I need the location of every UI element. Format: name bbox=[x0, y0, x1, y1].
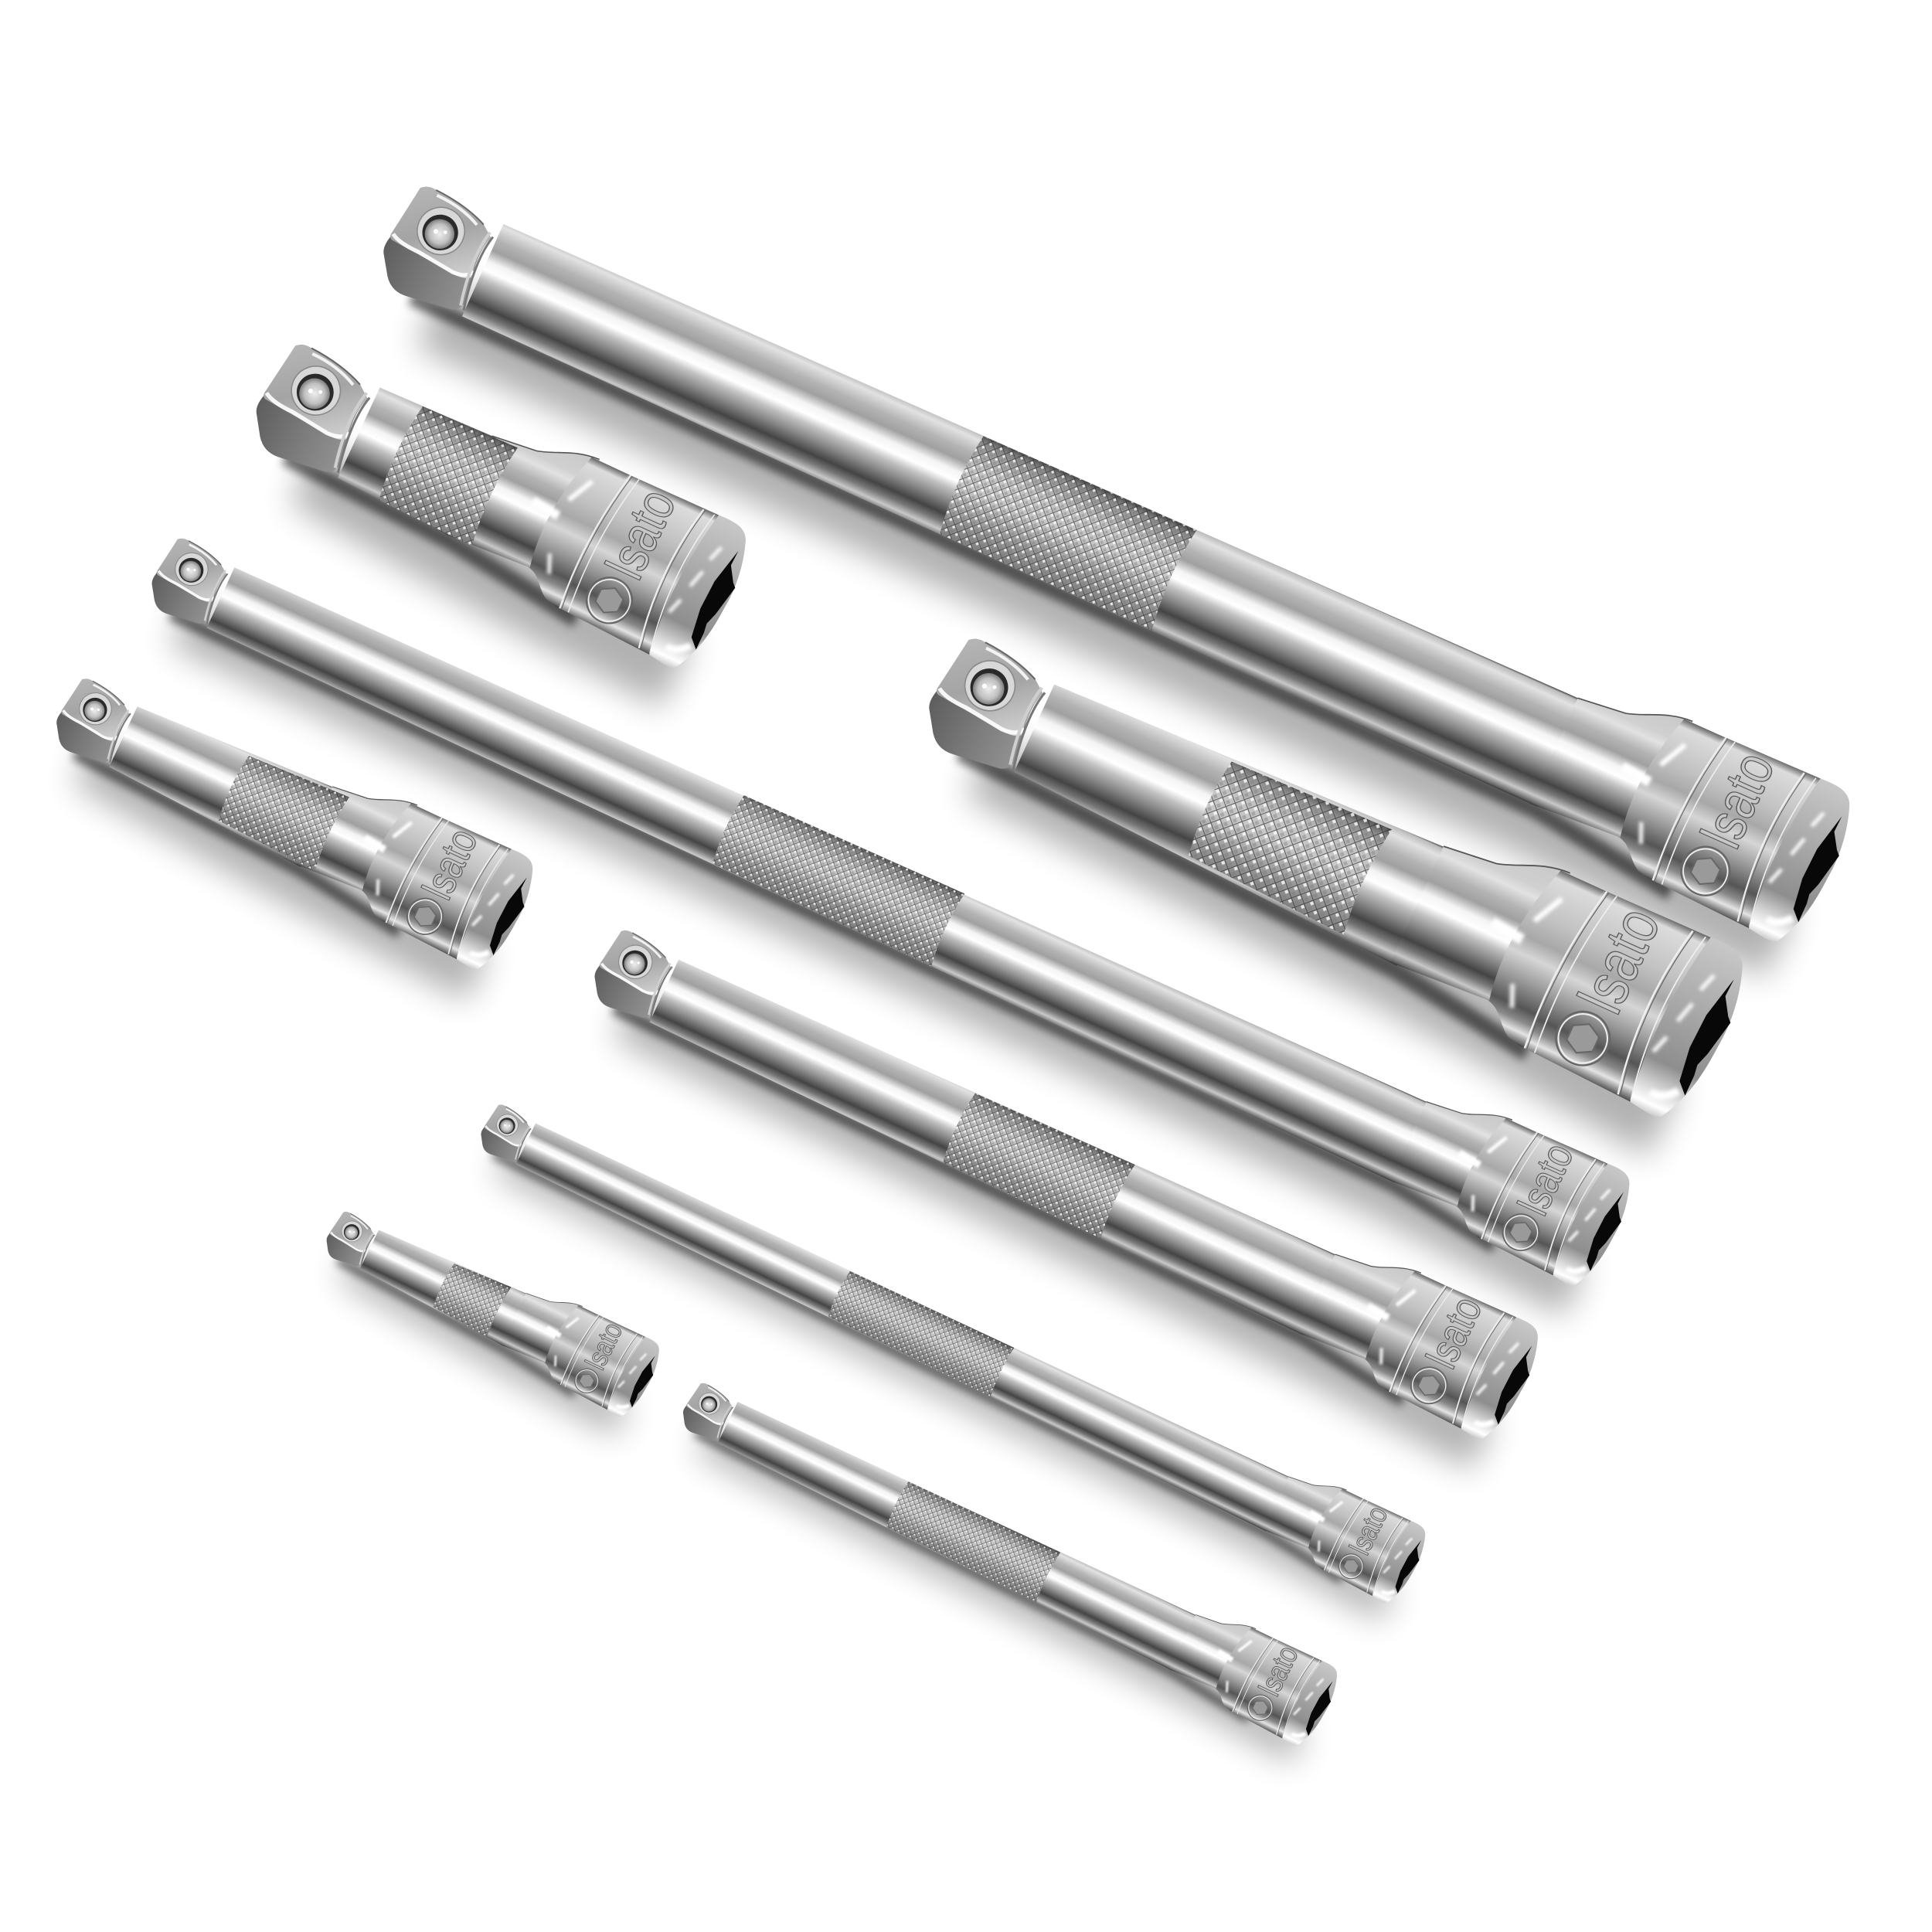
brand mark: lsato bbox=[1565, 896, 1674, 1023]
knurled grip bbox=[430, 1260, 511, 1337]
brand mark: lsato bbox=[413, 821, 487, 906]
extension bar D: long, middle bbox=[131, 512, 1641, 1294]
extension bar F: medium, centre bbox=[573, 904, 1549, 1447]
extension bar E: short, far left bbox=[36, 651, 544, 978]
extension bar I: slim, bottom bbox=[668, 1363, 1345, 1752]
brand mark: lsato bbox=[1253, 1641, 1305, 1701]
brand mark: lsato bbox=[595, 480, 688, 588]
extension bar C: short thick, upper left bbox=[231, 318, 760, 678]
knurled grip bbox=[1182, 755, 1392, 935]
extension bar B: thick, right bbox=[899, 600, 1760, 1129]
knurled grip bbox=[935, 434, 1196, 631]
knurled grip bbox=[884, 1478, 1060, 1602]
brand mark: lsato bbox=[1417, 1289, 1492, 1376]
soft shadows under the bars bbox=[61, 280, 1806, 1763]
extension bar H: smallest bbox=[312, 1193, 667, 1422]
brand mark: lsato bbox=[1689, 743, 1787, 857]
knurled grip bbox=[374, 402, 518, 546]
knurled grip bbox=[825, 1269, 1014, 1396]
extension bar G: slim long bbox=[466, 1086, 1434, 1609]
brand mark: lsato bbox=[1509, 1136, 1583, 1222]
knurled grip bbox=[939, 1090, 1135, 1239]
knurled grip bbox=[214, 750, 349, 871]
extension bar A: longest, top right bbox=[357, 155, 1865, 952]
knurled grip bbox=[709, 792, 964, 967]
brand mark: lsato bbox=[1344, 1502, 1394, 1560]
brand mark: lsato bbox=[580, 1318, 629, 1375]
